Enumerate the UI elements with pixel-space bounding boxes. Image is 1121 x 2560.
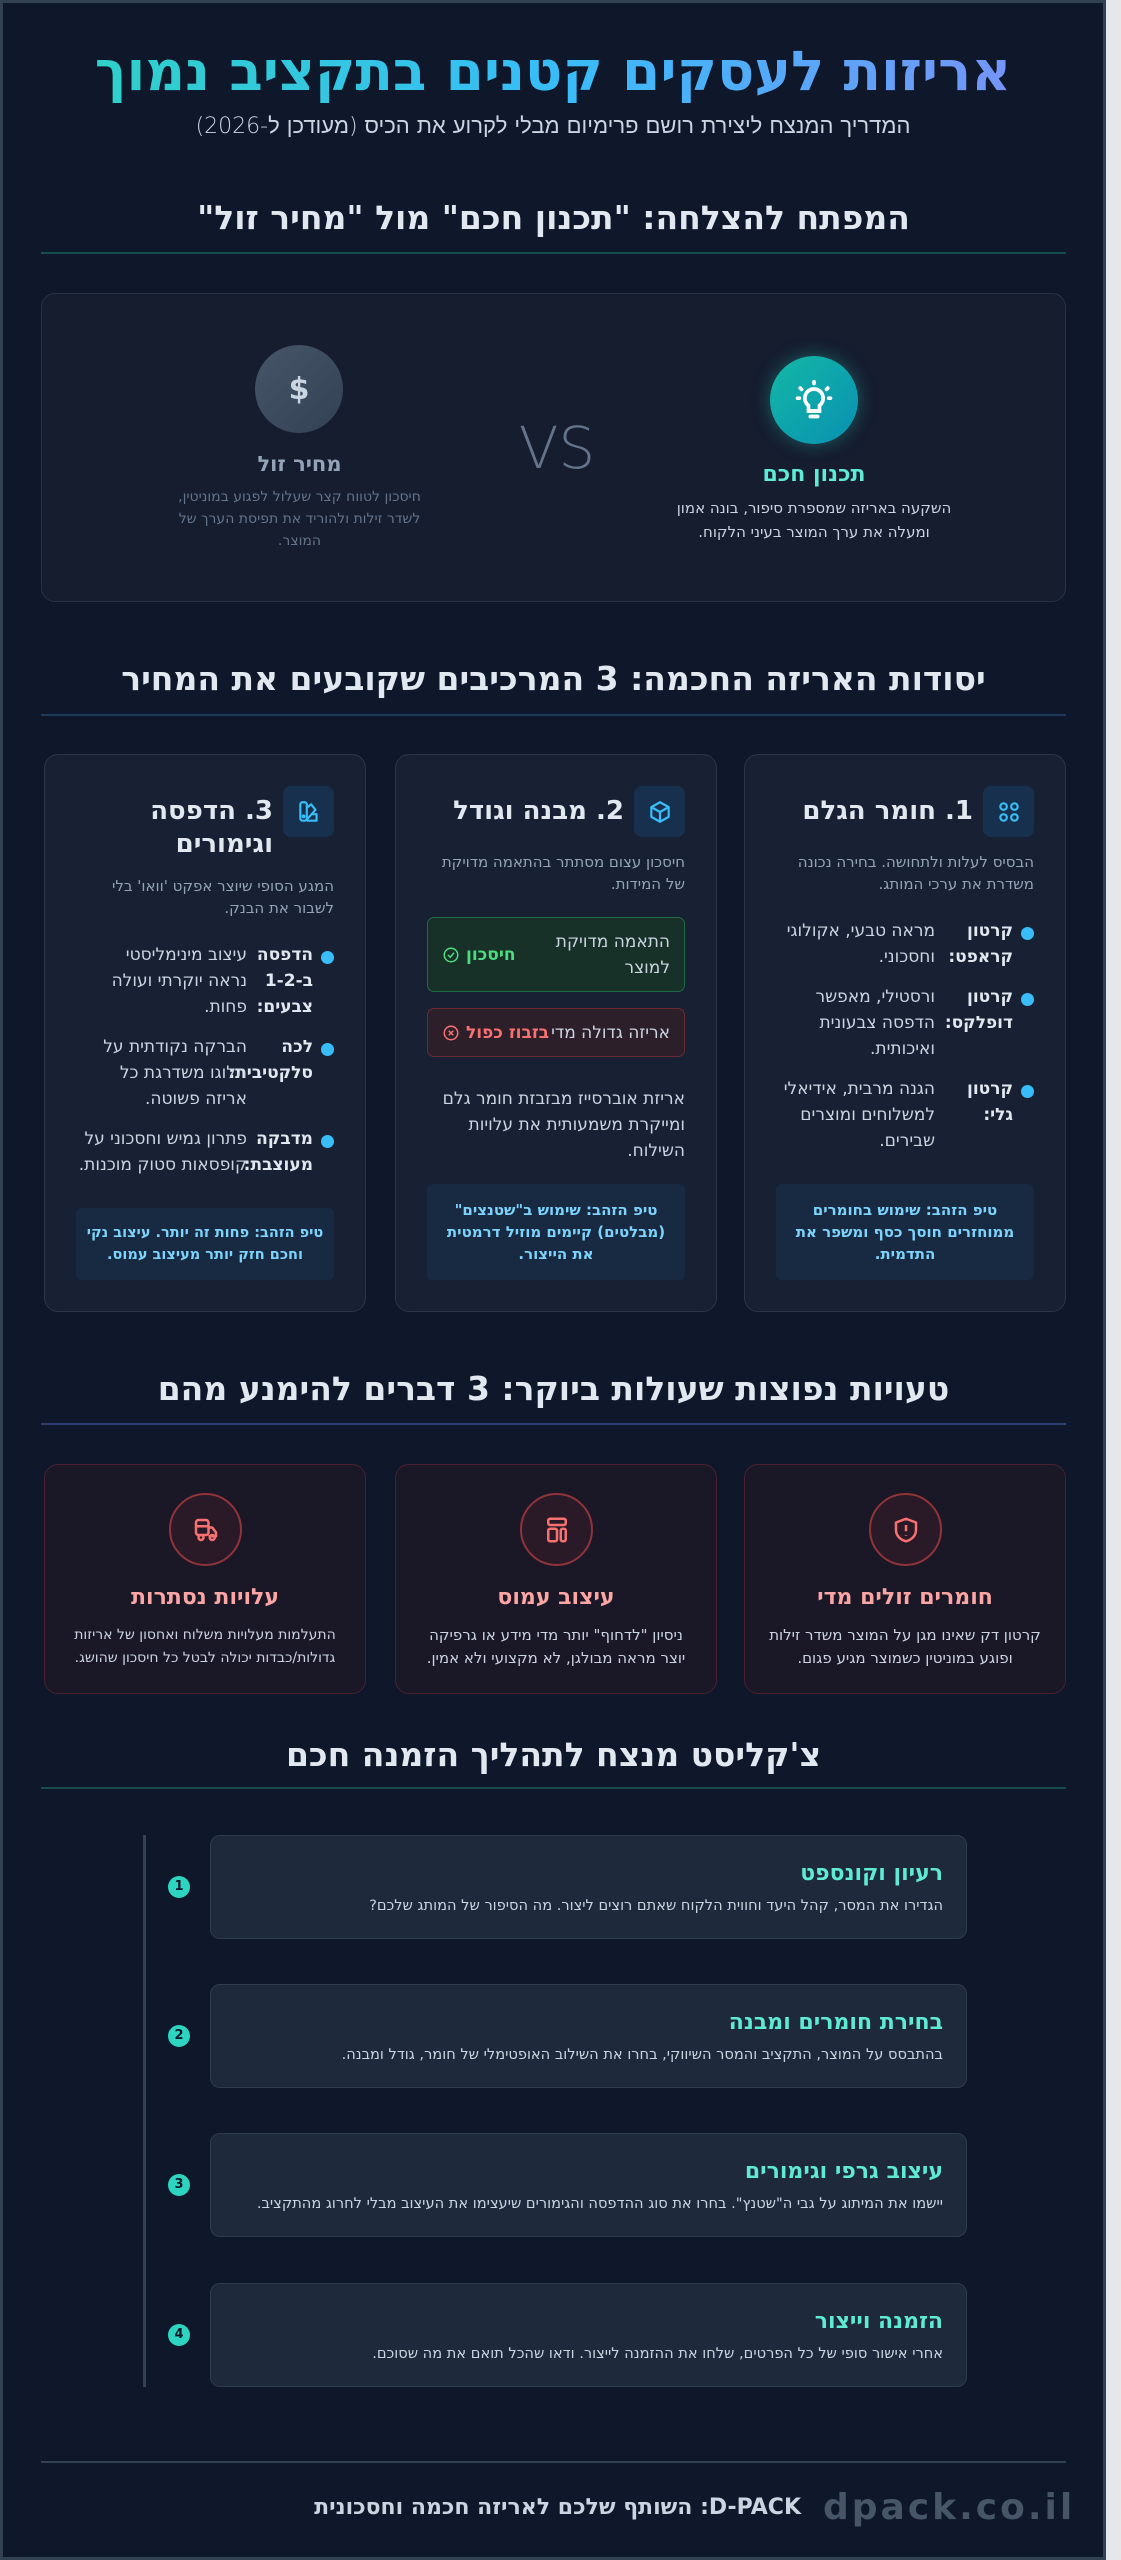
mistake desc: התעלמות מעלויות משלוח ואחסון של אריזות גדולות/כבדות יכולה לבטל כל חיסכון שהושג. — [74, 1627, 336, 1666]
step 3: עיצוב גרפי וגימורים — [745, 2159, 943, 2184]
VS label: VS — [519, 414, 595, 482]
tip: טיפ הזהב: שימוש ב"שטנצים" (מבלטים) קיימים מוזיל דרמטית את הייצור. — [447, 1201, 665, 1263]
panel: mistake 2 — [395, 1464, 717, 1694]
step number 3 — [168, 2174, 190, 2196]
heading: foundations: יסודות האריזה החכמה: 3 המרכיבים שקובעים את המחיר — [121, 659, 986, 698]
tip: טיפ הזהב: פחות זה יותר. עיצוב נקי וחכם חזק יותר מעיצוב עמוס. — [87, 1225, 323, 1263]
card header — [453, 786, 685, 837]
step number 3: 3 — [174, 2177, 184, 2192]
card header — [150, 786, 334, 859]
bullet list: לכה סלקטיבית: — [228, 1037, 313, 1083]
heading: smart planning vs cheap price: המפתח להצלחה: "תכנון חכם" מול "מחיר זול" — [197, 198, 910, 237]
step 3: יישמו את המיתוג על גבי ה"שטנץ". בחרו את סוג ההדפסה והגימורים שיעצימו את העיצוב מבלי לחרוג מהתקציב. — [257, 2195, 943, 2212]
card header — [802, 786, 1034, 837]
icon: cube — [634, 786, 685, 837]
icon: dollar: $ — [289, 372, 309, 406]
step 2: בהתבסס על המוצר, התקציב והמסר השיווקי, בחרו את השילוב האופטימלי של חומר, גודל ומבנה. — [342, 2046, 943, 2063]
bullet list: הדפסה ב-1-2 צבעים: — [257, 945, 313, 1017]
footer tagline: D-PACK: השותף שלכם לאריזה חכמה וחסכונית — [314, 2495, 801, 2520]
item: cheap price — [178, 345, 421, 549]
step 4: הזמנה וייצור — [815, 2309, 943, 2334]
bullet list — [784, 921, 1034, 1151]
text: smart planning desc: השקעה באריזה שמספרת סיפור, בונה אמון ומעלה את ערך המוצר בעיני הלקוח. — [677, 499, 951, 541]
bullet list: קרטון קראפט: — [948, 921, 1013, 967]
icon: layout — [520, 1493, 593, 1566]
bullet list: מדבקה מעוצבת: — [244, 1129, 313, 1175]
panel: mistake 3 — [44, 1464, 366, 1694]
good fit box: התאמה מדויקת — [556, 932, 670, 952]
card header: 1. חומר הגלם — [802, 796, 973, 826]
icon: swatch — [283, 786, 334, 837]
icon: grid — [983, 786, 1034, 837]
bullet list: ורסטילי, מאפשר הדפסה צבעונית ואיכותית. — [815, 987, 935, 1059]
bullet list: קרטון דופלקס: — [945, 987, 1013, 1033]
step 2 — [210, 1984, 967, 2088]
panel: comparison — [41, 293, 1066, 602]
good fit box — [427, 917, 685, 992]
bullet list: עיצוב מינימליסטי — [126, 945, 247, 965]
text: smart planning title: תכנון חכם — [762, 462, 866, 487]
step 4 — [210, 2283, 967, 2387]
bullet list: נראה יוקרתי ועולה — [112, 971, 247, 991]
mistake desc: קרטון דק שאינו מגן על המוצר משדר זילות ופוגע במוניטין כשמוצר מגיע פגום. — [769, 1626, 1041, 1667]
bullet list: הגנה מרבית, אידיאלי למשלוחים ומוצרים שבירים. — [784, 1079, 935, 1151]
card header: 2. מבנה וגודל — [453, 796, 624, 826]
step number 1 — [168, 1876, 190, 1898]
item: smart planning — [677, 348, 951, 541]
step 3 — [210, 2133, 967, 2237]
step 1: רעיון וקונספט — [800, 1861, 943, 1886]
good fit box: למוצר — [624, 958, 670, 978]
oversized box — [427, 1008, 685, 1057]
timeline line — [143, 1835, 146, 2387]
bullet list: קרטון גלי: — [967, 1079, 1013, 1125]
heading: mistakes: טעויות נפוצות שעולות ביוקר: 3 דברים להימנע מהם — [158, 1369, 949, 1408]
icon: dollar — [255, 345, 343, 433]
step number 4: 4 — [174, 2327, 184, 2342]
step number 1: 1 — [174, 1879, 184, 1894]
card desc: המגע הסופי שיוצר אפקט 'וואו' בלי לשבור את הבנק. — [112, 877, 334, 917]
tip — [776, 1184, 1034, 1280]
card header: 3. הדפסה וגימורים — [150, 796, 273, 859]
icon: truck — [169, 1493, 242, 1566]
mistake title: עלויות נסתרות — [131, 1585, 279, 1610]
step 1: הגדירו את המסר, קהל היעד וחווית הלקוח שאתם רוצים ליצור. מה הסיפור של המותג שלכם? — [369, 1897, 943, 1914]
step 4: אחרי אישור סופי של כל הפרטים, שלחו את ההזמנה לייצור. ודאו שהכל תואם את מה שסוכם. — [372, 2345, 943, 2362]
text: cheap price desc: חיסכון לטווח קצר שעלול לפגוע במוניטין, לשדר זילות ולהוריד את תפיסת הערך של המוצר. — [178, 489, 421, 549]
mistake title: עיצוב עמוס — [497, 1585, 615, 1610]
step number 4 — [168, 2324, 190, 2346]
mistake desc: ניסיון "לדחוף" יותר מדי מידע או גרפיקה יוצר מראה מבולגן, לא מקצועי ולא אמין. — [427, 1626, 685, 1667]
card desc: הבסיס לעלות ולתחושה. בחירה נכונה משדרת את ערכי המותג. — [798, 853, 1034, 893]
paragraph: אריזת אוברסייז מבזבזת חומר גלם ומייקרת משמעותית את עלויות השילוח. — [443, 1089, 685, 1161]
step number 2: 2 — [174, 2028, 184, 2043]
bullet list: פתרון גמיש וחסכוני על קופסאות סטוק מוכנות. — [79, 1129, 247, 1175]
bullet list: פחות. — [204, 997, 247, 1017]
bullet list: מראה טבעי, אקולוגי וחסכוני. — [787, 921, 935, 967]
icon: shield — [869, 1493, 942, 1566]
step 2: בחירת חומרים ומבנה — [729, 2010, 943, 2035]
card desc: חיסכון עצום מסתתר בהתאמה מדויקת של המידות. — [442, 853, 685, 893]
good fit box: חיסכון — [466, 944, 516, 964]
tip — [76, 1208, 334, 1280]
bullet list: הברקה נקודתית על הלוגו משדרגת כל אריזה פשוטה. — [103, 1037, 247, 1109]
heading: checklist: צ'קליסט מנצח לתהליך הזמנה חכם — [286, 1735, 821, 1774]
step 1 — [210, 1835, 967, 1939]
text: cheap price title: מחיר זול — [257, 452, 342, 476]
footer brand url: dpack.co.il — [823, 2487, 1075, 2528]
panel: card 1 material — [744, 754, 1066, 1312]
tip: טיפ הזהב: שימוש בחומרים ממוחזרים חוסך כסף ומשפר את התדמית. — [796, 1201, 1014, 1263]
oversized box: אריזה גדולה מדי — [551, 1022, 670, 1042]
panel: card 2 structure — [395, 754, 717, 1312]
panel: card 3 printing — [44, 754, 366, 1312]
step number 2 — [168, 2025, 190, 2047]
bullet list — [79, 945, 334, 1175]
tip — [427, 1184, 685, 1280]
title: אריזות לעסקים קטנים בתקציב נמוך — [95, 39, 1011, 103]
oversized box: בזבוז כפול — [466, 1022, 549, 1042]
icon: lightbulb — [770, 356, 858, 444]
subtitle: המדריך המנצח ליצירת רושם פרימיום מבלי לקרוע את הכיס (מעודכן ל-2026) — [196, 114, 910, 139]
panel: mistake 1 — [744, 1464, 1066, 1694]
mistake title: חומרים זולים מדי — [817, 1585, 993, 1610]
